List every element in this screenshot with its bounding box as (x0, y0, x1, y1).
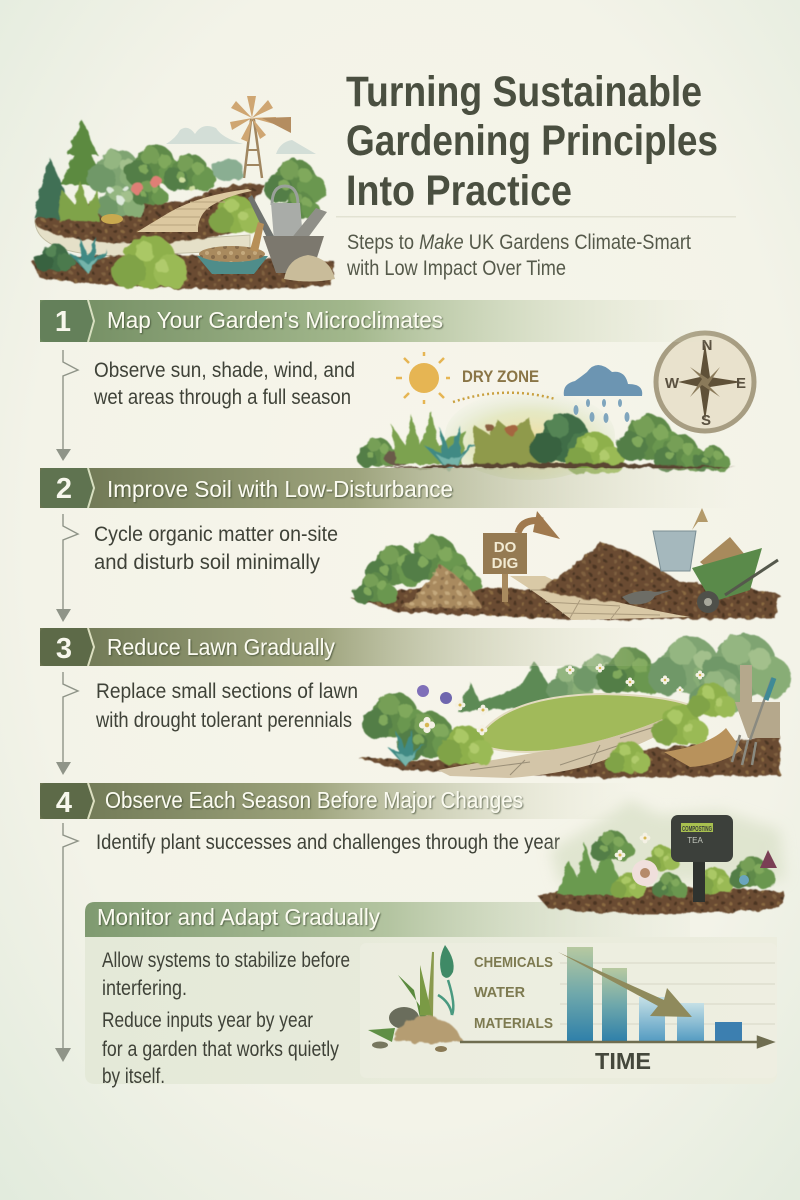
soil top (35, 184, 265, 243)
step 1 connector arrow (56, 350, 78, 461)
background shrubs (458, 634, 791, 712)
step 1 heading band: Map Your Garden's Microclimates (107, 307, 443, 333)
rain cloud and drops (564, 365, 642, 423)
flowers (417, 685, 488, 735)
bars (567, 947, 742, 1041)
step 2 text: and disturb soil minimally (94, 551, 320, 574)
step 3 heading band (40, 628, 660, 666)
white flowers (566, 664, 704, 694)
sign: TEA (687, 836, 703, 845)
do dig sign: DIG (492, 555, 518, 572)
step 2 heading band: 2 (56, 473, 72, 505)
faded background foliage (550, 800, 785, 885)
title: Into Practice (346, 167, 572, 215)
soil ground (350, 582, 780, 620)
do dig sign: DO (494, 539, 517, 556)
step 4 illustration: plants and monitor sign (537, 800, 785, 914)
panel text (102, 949, 350, 1088)
compass (656, 333, 754, 431)
axis labels: CHEMICALS (474, 954, 553, 971)
panel text: Reduce inputs year by year (102, 1009, 313, 1032)
grid lines (560, 963, 775, 1024)
number badge (40, 300, 93, 342)
pot (263, 236, 324, 273)
clouds (166, 126, 316, 154)
compass: E (736, 375, 746, 392)
step 3 illustration: lawn with perennials (358, 634, 791, 778)
step 4 heading band: Observe Each Season Before Major Changes (105, 787, 523, 813)
compass: W (665, 375, 680, 392)
stone path (438, 706, 698, 778)
dry zone label: DRY ZONE (462, 367, 539, 386)
step 4 text: Identify plant successes and challenges through the year (96, 831, 560, 854)
step 4 connector arrow (55, 823, 78, 1062)
step 3 heading band: Reduce Lawn Gradually (107, 634, 335, 660)
panel header: Monitor and Adapt Gradually (97, 904, 380, 930)
stone pillar (735, 665, 780, 738)
icon: sprouting rock (368, 945, 462, 1052)
axis (460, 1037, 772, 1047)
plants along ground (357, 412, 737, 474)
title: Turning Sustainable (346, 68, 702, 116)
rock (284, 255, 335, 282)
plants (558, 830, 775, 898)
bed wall (35, 220, 250, 256)
panel text: for a garden that works quietly (102, 1038, 339, 1061)
step 2 illustration: no dig compost (350, 508, 780, 620)
step 2 text: Cycle organic matter on-site (94, 523, 338, 546)
step 2 text (94, 523, 338, 574)
panel text: by itself. (102, 1065, 165, 1088)
step 3 heading band: 3 (56, 633, 72, 665)
sign: COMPOSTING (682, 826, 712, 833)
garden fork (732, 678, 772, 765)
stone path (137, 189, 252, 232)
windmill (230, 96, 291, 178)
title: Gardening Principles (346, 117, 718, 165)
step 1 heading band: 1 (55, 306, 71, 338)
step 1 text: Observe sun, shade, wind, and (94, 359, 355, 382)
flowers (615, 833, 777, 886)
step 3 text: Replace small sections of lawn (96, 680, 358, 703)
subtitle: with Low Impact Over Time (346, 257, 566, 280)
plants (34, 120, 326, 233)
watering can and tools (248, 186, 327, 243)
monitor and adapt panel (85, 902, 777, 1088)
subtitle (346, 231, 691, 280)
step 3 text (95, 680, 358, 732)
step 2 connector arrow (56, 514, 78, 622)
curved arrow (518, 511, 560, 539)
lawn (478, 694, 692, 752)
low plants (35, 235, 188, 289)
soil base (358, 735, 780, 778)
chart: decreasing inputs over time: TIME (595, 1048, 651, 1074)
chart: decreasing inputs over time (460, 947, 775, 1074)
trowel (622, 590, 672, 604)
wooden tray (664, 728, 742, 767)
compass: N (702, 337, 712, 354)
bucket (653, 508, 708, 571)
compost pile (540, 542, 700, 603)
step 2 heading band (40, 468, 740, 508)
chart: decreasing inputs over time: MATERIALS (474, 1015, 553, 1032)
step 1 illustration: microclimates (357, 333, 754, 480)
do dig sign (483, 533, 527, 602)
step 1 text: wet areas through a full season (93, 386, 351, 409)
compass: S (701, 412, 711, 429)
right shrubs (605, 683, 736, 773)
panel text: interfering. (102, 977, 187, 1000)
step 1 heading band (40, 300, 740, 342)
mulch pile (402, 565, 482, 608)
title (346, 68, 718, 215)
step 3 text: with drought tolerant perennials (95, 709, 352, 732)
panel text: Allow systems to stabilize before (102, 949, 350, 972)
step 2 heading band: Improve Soil with Low-Disturbance (107, 476, 453, 502)
stone path (510, 576, 690, 620)
wheelbarrow (692, 537, 778, 613)
subtitle: Steps to Make UK Gardens Climate-Smart (347, 231, 691, 254)
step 1 text (93, 359, 355, 409)
green bush (353, 536, 482, 604)
left flower bed (362, 692, 493, 766)
warm glow (445, 390, 615, 480)
panel header (85, 902, 690, 937)
hero illustration: garden bed with windmill and tools (32, 96, 335, 289)
yellow bulbs (101, 214, 123, 224)
soil (537, 887, 785, 914)
ground soil (32, 255, 335, 289)
chart: decreasing inputs over time: WATER (474, 984, 525, 1001)
bowl of compost (197, 222, 268, 274)
sun (396, 352, 450, 404)
step 4 heading band: 4 (56, 787, 72, 819)
step 4 heading band (40, 783, 640, 819)
sign (671, 815, 733, 902)
step 3 connector arrow (56, 672, 78, 775)
trend arrow (558, 952, 692, 1017)
